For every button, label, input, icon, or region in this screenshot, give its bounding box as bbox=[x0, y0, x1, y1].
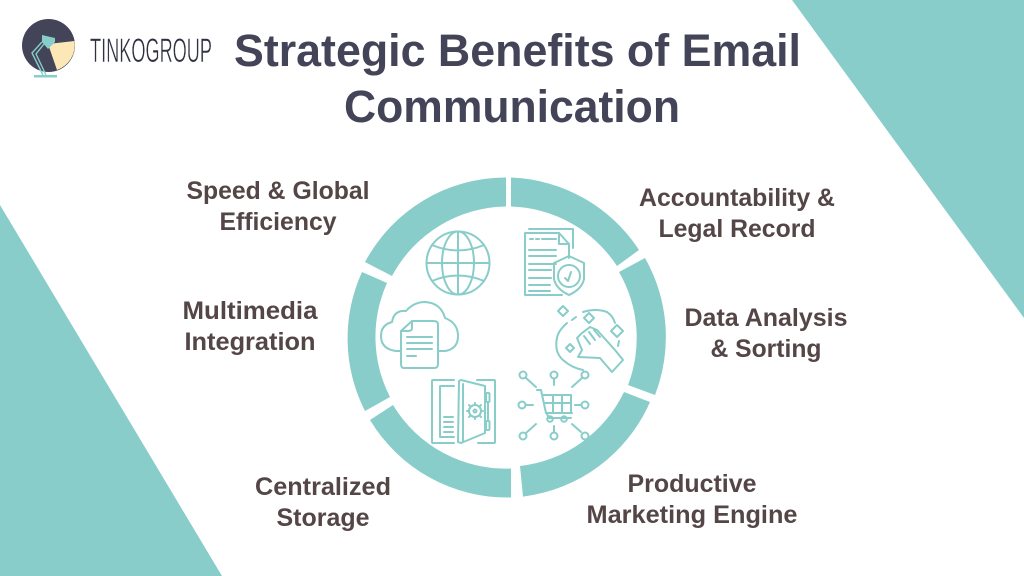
ring segment: marketing bbox=[520, 392, 650, 497]
ring segment: speed bbox=[365, 178, 506, 276]
background triangle: top right bbox=[792, 0, 1024, 318]
label: multimedia integration: Integration bbox=[184, 328, 316, 356]
label: speed and global efficiency: Efficiency bbox=[220, 208, 337, 236]
ring segment: storage bbox=[370, 405, 511, 498]
logo: Tinkogroup bbox=[22, 19, 212, 78]
label: productive marketing engine: Productive bbox=[628, 470, 757, 498]
circular ring of six segments bbox=[348, 178, 666, 498]
background triangle: bottom left bbox=[0, 205, 222, 576]
logo wordmark: TINKOGROUP bbox=[90, 32, 212, 70]
icon: document with shield bbox=[525, 229, 584, 295]
icon: shopping cart network bbox=[518, 372, 588, 440]
ring segment: multimedia bbox=[348, 272, 390, 411]
ring segment: data analysis bbox=[619, 258, 666, 395]
icon: open safe bbox=[432, 380, 495, 443]
label: speed and global efficiency bbox=[186, 177, 370, 236]
label: accountability and legal record: Accountability & bbox=[639, 184, 835, 212]
label: accountability and legal record bbox=[639, 184, 835, 243]
icon: hand wiping with sparkles bbox=[556, 306, 623, 372]
label: productive marketing engine: Marketing Engine bbox=[586, 501, 798, 529]
icon: globe bbox=[426, 232, 490, 294]
logo lamp emblem bbox=[22, 19, 75, 78]
label: centralized storage: Storage bbox=[276, 504, 370, 532]
label: data analysis and sorting: & Sorting bbox=[710, 335, 822, 363]
label: speed and global efficiency: Speed & Global bbox=[186, 177, 370, 205]
title: Communication bbox=[344, 81, 680, 132]
label: multimedia integration: Multimedia bbox=[182, 297, 319, 325]
label: data analysis and sorting: Data Analysis bbox=[684, 304, 848, 332]
title bbox=[234, 25, 801, 132]
title: Strategic Benefits of Email bbox=[234, 25, 801, 76]
label: centralized storage: Centralized bbox=[255, 473, 391, 501]
ring segment: accountability bbox=[511, 178, 639, 266]
label: productive marketing engine bbox=[586, 470, 798, 529]
label: accountability and legal record: Legal Record bbox=[658, 215, 816, 243]
label: data analysis and sorting bbox=[684, 304, 848, 363]
icon: cloud with document bbox=[381, 302, 458, 368]
label: centralized storage bbox=[255, 473, 391, 532]
label: multimedia integration bbox=[182, 297, 319, 356]
